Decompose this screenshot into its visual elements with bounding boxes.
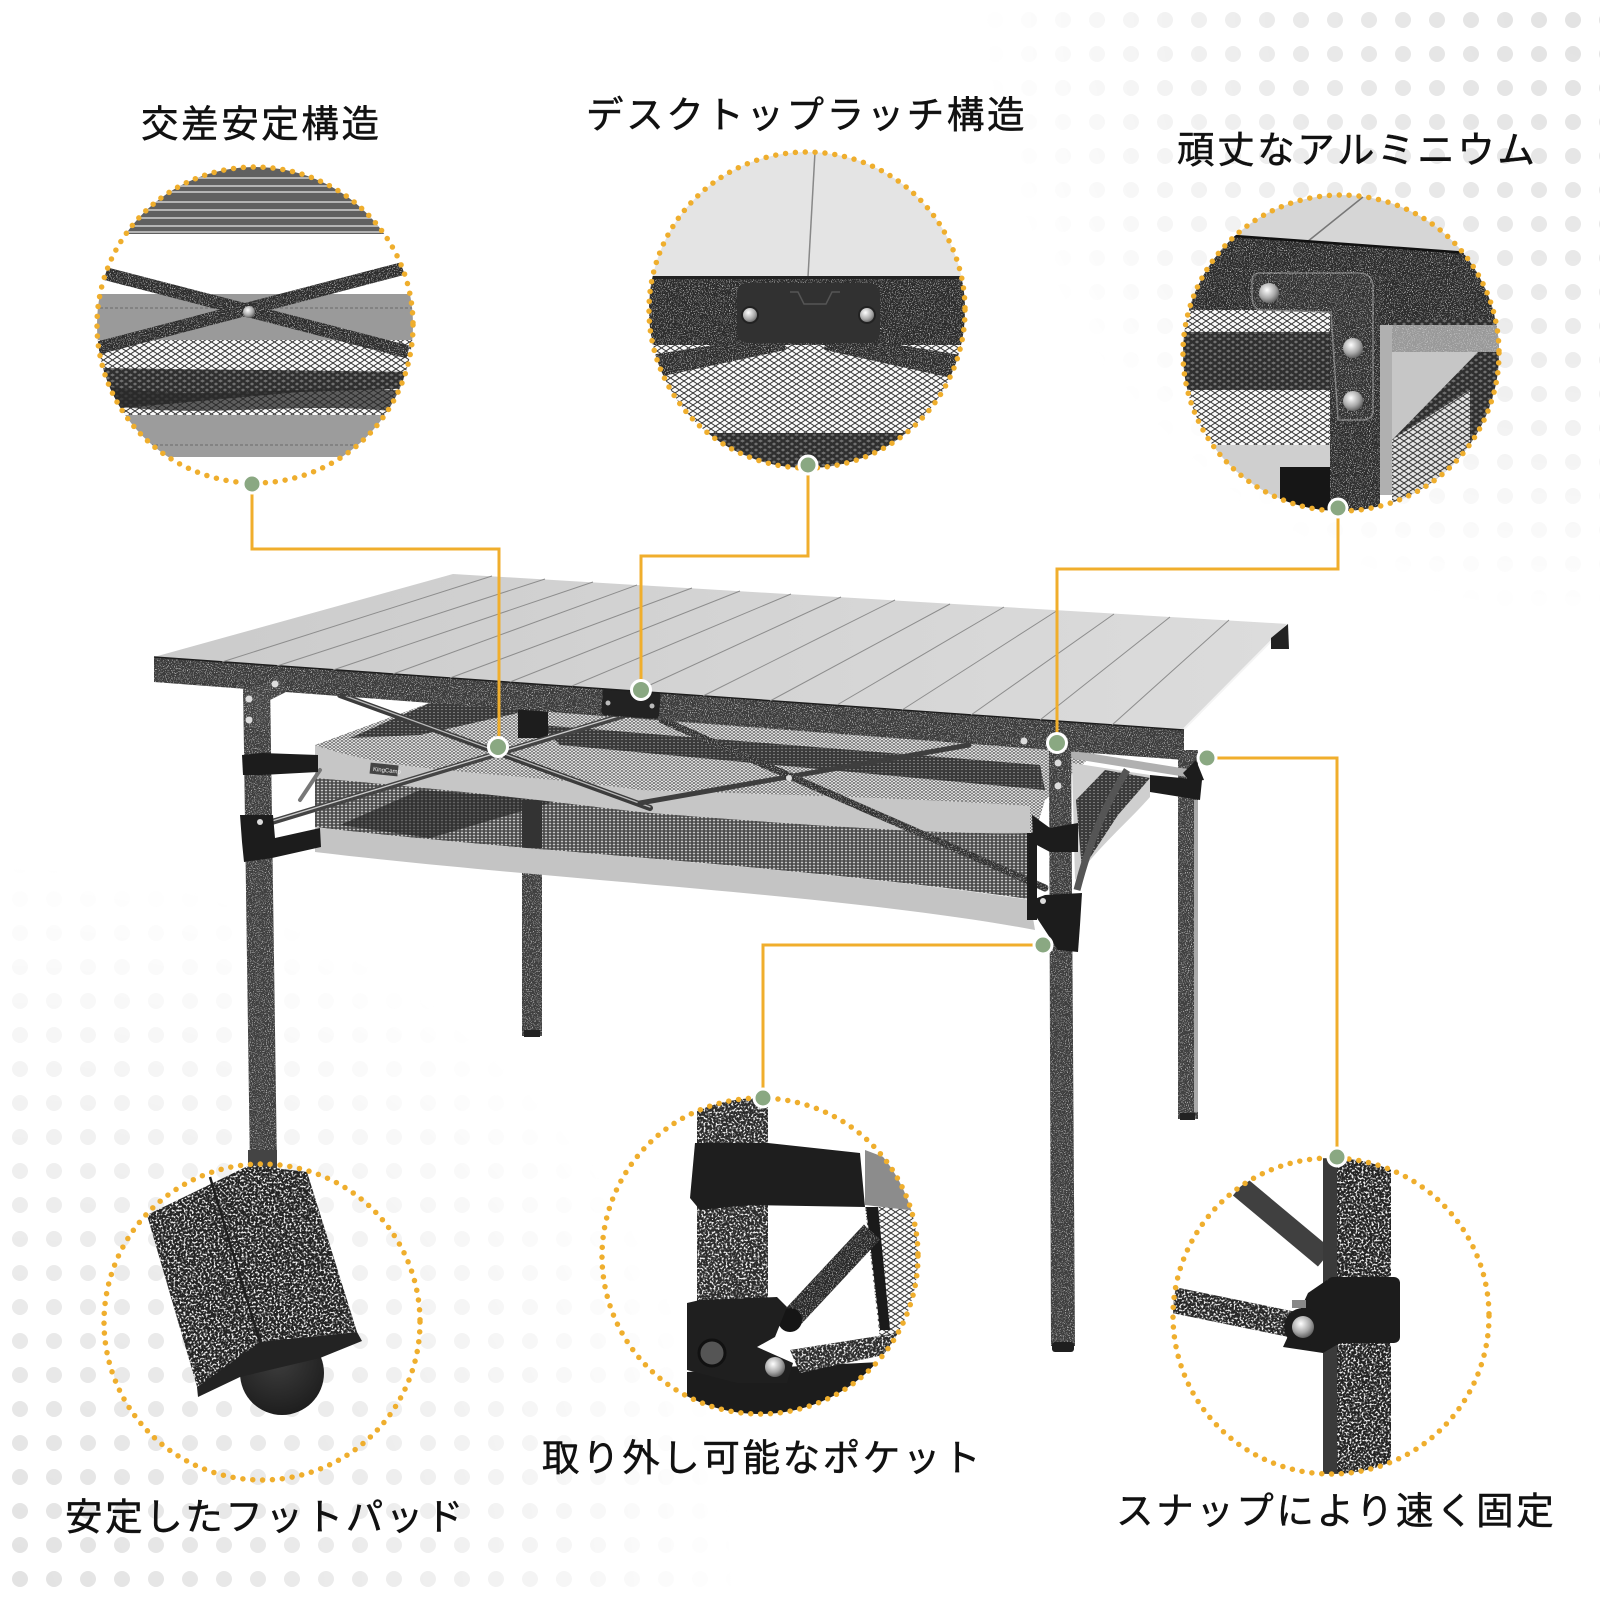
right clamps <box>1027 760 1204 952</box>
square post <box>697 1095 768 1315</box>
front legs <box>243 680 1075 1346</box>
dotted ring <box>104 1164 420 1480</box>
horizontal rod <box>790 1333 897 1373</box>
slats seen from below <box>128 167 384 234</box>
post <box>1330 310 1380 515</box>
cross bars <box>262 694 1187 888</box>
mesh left side <box>1184 310 1330 332</box>
mesh below <box>640 345 975 470</box>
table photo illustration <box>154 574 1289 1352</box>
detail circle: desktop latch <box>640 150 975 470</box>
foot base <box>197 1332 362 1397</box>
rear center bracket <box>518 708 548 738</box>
fabric band lower <box>125 415 385 457</box>
heading: sturdy aluminium: 頑丈なアルミニウム <box>1177 129 1538 171</box>
table top <box>652 152 961 276</box>
callout lines <box>252 465 1338 1157</box>
clamp <box>1283 1277 1400 1353</box>
latch <box>737 283 880 343</box>
table frame edge <box>154 657 1184 760</box>
post face <box>1337 1150 1391 1485</box>
dotted ring <box>602 1098 918 1414</box>
detail circle: sturdy aluminium <box>1180 190 1512 515</box>
mesh and fabric <box>865 1207 918 1338</box>
pivot <box>786 775 792 781</box>
dotted ring <box>649 152 965 468</box>
post side <box>1323 1150 1337 1485</box>
fabric band upper <box>90 294 420 340</box>
heading: snap: スナップにより速く固定 <box>1116 1490 1556 1532</box>
anchor dots <box>243 456 1347 1166</box>
background halftone: bottom left <box>12 1028 572 1587</box>
far edge tab <box>1271 624 1289 649</box>
upper rod <box>1240 1187 1325 1258</box>
crossed bars <box>98 268 408 352</box>
dotted ring <box>1173 1158 1489 1474</box>
heading: cross structure: 交差安定構造 <box>141 103 382 145</box>
right side inner <box>1392 320 1499 502</box>
dotted ring <box>1183 195 1499 511</box>
detail circle: cross structure <box>90 167 420 483</box>
rear legs <box>522 700 1198 1119</box>
leg stub <box>248 1150 277 1170</box>
strap <box>690 1143 865 1210</box>
foot tube <box>147 1165 357 1390</box>
frame <box>640 279 975 345</box>
pivot rivet <box>243 306 255 318</box>
table top <box>1236 195 1460 251</box>
frame <box>1188 236 1497 327</box>
bracket <box>687 1297 793 1383</box>
dotted ring <box>97 167 413 483</box>
logo tag <box>370 763 402 776</box>
aluminium table top <box>154 574 1288 730</box>
rivets <box>1259 283 1363 411</box>
heading: latch structure: デスクトップラッチ構造 <box>586 94 1027 136</box>
detail circle: quick snap <box>1173 1150 1489 1485</box>
detail circle: stable foot pad <box>104 1150 420 1480</box>
heading: pocket: 取り外し可能なポケット <box>542 1437 983 1479</box>
background halftone: top right <box>1104 12 1600 498</box>
lower strap <box>687 1362 874 1414</box>
heading: foot pad: 安定したフットパッド <box>65 1496 466 1538</box>
logo tag: KingCamp <box>373 767 402 776</box>
slat lines <box>222 576 1229 725</box>
bracket <box>1252 273 1373 420</box>
diagonal rod <box>790 1232 872 1320</box>
latch on frame <box>601 688 661 719</box>
mesh layers <box>90 340 420 415</box>
storage basket <box>315 702 1150 930</box>
frame bars <box>650 345 960 375</box>
rubber ball <box>240 1331 324 1415</box>
left straps and clamps <box>240 753 321 862</box>
lower rod <box>1173 1300 1295 1325</box>
right side fan <box>1072 763 1150 880</box>
corner brackets and bolts <box>243 677 1062 790</box>
detail circle: removable pocket <box>602 1095 925 1430</box>
